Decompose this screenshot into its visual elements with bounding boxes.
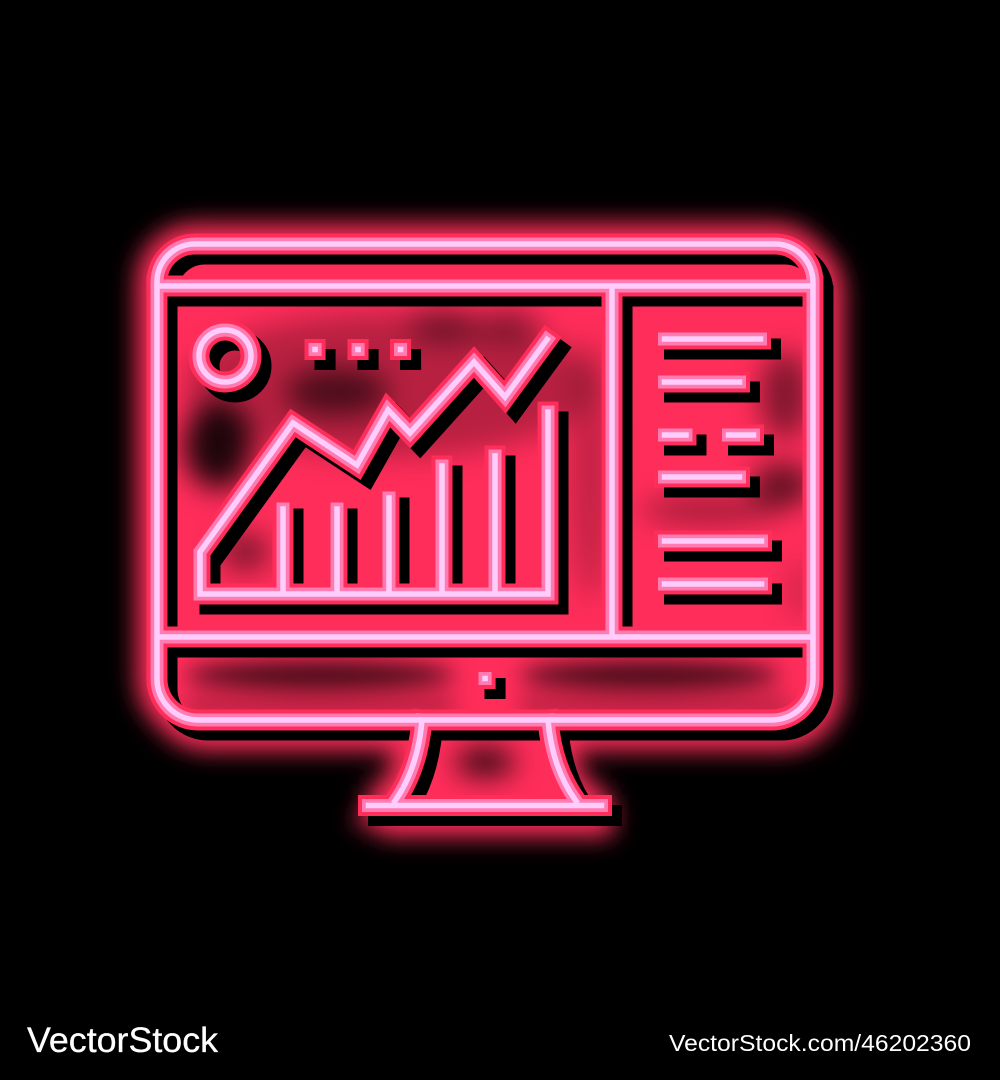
icon: profile circle — [199, 330, 251, 382]
chart: rising line with bars — [200, 340, 548, 594]
outer neon glow — [157, 244, 823, 816]
watermark logo: VectorStock — [27, 1021, 219, 1060]
icon: power button — [474, 668, 496, 689]
side panel text lines — [664, 339, 762, 584]
icon: three window dots — [315, 339, 401, 360]
drop shadows of all line work — [167, 254, 823, 816]
screen fill with dark glow blotches — [178, 306, 802, 795]
watermark image id: VectorStock.com/46202360 — [669, 1030, 971, 1056]
monitor frame and stand — [157, 244, 813, 806]
neon monitor illustration with watermark — [27, 203, 970, 1052]
